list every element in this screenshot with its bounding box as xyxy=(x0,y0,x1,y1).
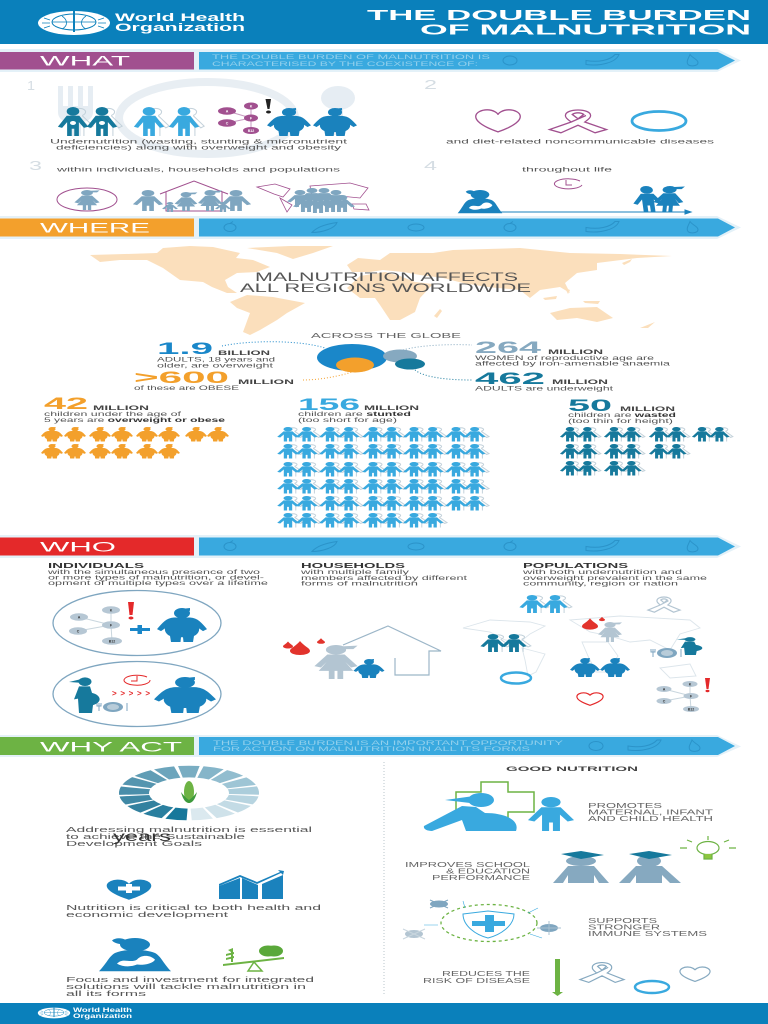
stat: 50 million wasted children: MILLION xyxy=(620,406,676,413)
icon: heart xyxy=(476,110,520,132)
text: reduces the risk of disease xyxy=(423,971,531,985)
elderly couple xyxy=(631,186,685,212)
micronutrient network: F xyxy=(250,116,253,120)
text: promotes health: PROMOTES xyxy=(588,803,663,810)
banner: WHY ACT: WHY ACT xyxy=(40,738,183,754)
text block: households: members affected by different xyxy=(301,575,467,582)
banner: WHY ACT: FOR ACTION ON MALNUTRITION IN ALL ITS FORMS xyxy=(213,746,531,753)
text block: households: forms of malnutrition xyxy=(301,580,418,588)
banner: WHY ACT xyxy=(0,735,741,757)
stat: 462 million underweight: 462 xyxy=(475,369,545,388)
title: THE DOUBLE BURDEN xyxy=(367,8,751,24)
individuals circle: deficiency plus obesity xyxy=(53,590,221,656)
world map xyxy=(90,246,672,335)
stat: 42 million overweight children: children under the age of xyxy=(44,411,181,418)
map heading: ALL REGIONS WORLDWIDE xyxy=(240,283,532,295)
text: promotes health: AND CHILD HEALTH xyxy=(588,816,713,823)
stat: 1.9 billion overweight xyxy=(157,339,275,370)
text: sustainable development goals: years xyxy=(113,828,171,844)
map heading xyxy=(240,272,532,295)
pictogram: blue children xyxy=(277,427,489,528)
footer organisation name: Organization xyxy=(73,1014,133,1020)
micronutrient network: K xyxy=(250,104,253,108)
caption 1 xyxy=(50,138,347,152)
across the globe heading: ACROSS THE GLOBE xyxy=(311,333,462,340)
stat: 462 million underweight xyxy=(475,369,613,392)
text: improves school xyxy=(405,862,531,882)
icon: balance scale with grain and apple xyxy=(223,946,284,971)
micronutrient network: B12 xyxy=(248,129,254,133)
caption 1: deficiencies) along with overweight and obesity xyxy=(56,144,342,152)
stat: 600 million obese: MILLION xyxy=(238,379,295,386)
stat: 42 million overweight children: 5 years are overweight or obese xyxy=(44,417,225,424)
stat: 50 million wasted children: (too thin for height) xyxy=(568,418,673,425)
arrow: down xyxy=(552,959,563,996)
text block: individuals: with the simultaneous presence of two xyxy=(46,569,260,576)
text: promotes health xyxy=(588,803,714,823)
icon: graduates xyxy=(553,851,681,883)
text: improves school: IMPROVES SCHOOL xyxy=(405,862,530,869)
caption 4: throughout life xyxy=(522,166,612,174)
text: improves school: & EDUCATION xyxy=(446,868,530,876)
text block: individuals xyxy=(46,563,268,587)
faint backdrop: fork, plate and spoon xyxy=(58,82,355,154)
bubble cluster xyxy=(317,344,425,372)
number 1: 1 xyxy=(27,78,35,93)
stat: 156 million stunted children: (too short for age) xyxy=(298,417,397,424)
banner: WHAT: THE DOUBLE BURDEN OF MALNUTRITION IS xyxy=(212,54,491,61)
stat: 42 million overweight children: MILLION xyxy=(93,405,150,412)
stat: 264 million women: WOMEN of reproductive age are xyxy=(475,355,654,362)
stat: 156 million stunted children: 156 xyxy=(298,395,360,414)
stat: 462 million underweight: ADULTS are underweight xyxy=(475,386,613,392)
population illustration on world map: B12 xyxy=(688,707,694,711)
stat: 264 million women: 264 xyxy=(475,338,542,357)
icon: pregnant woman, child and green cross xyxy=(424,782,574,831)
text block: populations: with both undernutrition and xyxy=(521,569,682,576)
text block: populations: community, region or nation xyxy=(523,580,678,588)
number 2: 2 xyxy=(424,77,437,92)
dotted connectors xyxy=(222,342,472,380)
panel: what 3 individuals, households, populations xyxy=(29,158,369,213)
text: sustainable development goals xyxy=(66,825,313,848)
pictogram: teal children xyxy=(560,427,733,476)
stat: 1.9 billion overweight: ADULTS, 18 years and xyxy=(157,356,275,364)
text: supports immune systems: SUPPORTS xyxy=(588,918,658,925)
text block: populations: POPULATIONS xyxy=(523,563,629,570)
text: supports immune systems: STRONGER xyxy=(588,924,660,932)
population illustration on world map: A xyxy=(663,687,666,691)
stat: 264 million women: affected by iron-amenable anaemia xyxy=(475,360,670,368)
stat: 50 million wasted children: 50 xyxy=(568,396,612,415)
panel: what 1 undernutrition and overweight xyxy=(27,78,357,154)
banner: WHAT: WHAT xyxy=(40,52,131,68)
individual in a circle xyxy=(57,188,117,211)
population illustration on world map: K xyxy=(689,682,692,686)
stat: 264 million women xyxy=(475,338,670,368)
organisation name xyxy=(115,12,246,34)
household illustration xyxy=(283,626,441,679)
heading: good nutrition: GOOD NUTRITION xyxy=(506,766,639,773)
pictogram: orange children xyxy=(41,427,229,458)
icon: ring xyxy=(632,112,686,130)
banner: WHY ACT: THE DOUBLE BURDEN IS AN IMPORTANT OPPORTUNITY xyxy=(213,740,564,747)
text: sustainable development goals: to achieve the Sustainable xyxy=(66,832,245,841)
text: integrated solutions: solutions will tackle malnutrition in xyxy=(66,982,306,991)
text: health and economic development xyxy=(66,903,321,919)
world outline with crowd xyxy=(257,183,369,213)
population illustration on world map xyxy=(463,595,710,712)
stat: 600 million obese xyxy=(134,368,295,392)
text block: individuals: opment of multiple types over a lifetime xyxy=(48,580,268,587)
banner: WHAT xyxy=(0,49,741,72)
text block: populations: overweight prevalent in the same xyxy=(523,575,707,582)
footer logo xyxy=(38,1008,70,1018)
caption 1: Undernutrition (wasting, stunting & micronutrient xyxy=(50,138,347,146)
icon: mother and baby xyxy=(99,938,171,971)
number 3: 3 xyxy=(29,158,42,173)
panel: what 4 throughout life xyxy=(424,158,691,214)
stat: 600 million obese: of these are OBESE xyxy=(134,385,240,392)
overweight children xyxy=(267,108,357,136)
icon: shield with viruses xyxy=(403,900,561,942)
stat: 462 million underweight: MILLION xyxy=(552,379,609,386)
stat: 1.9 billion overweight: 1.9 xyxy=(157,339,213,358)
stat: 156 million stunted children xyxy=(298,395,420,424)
text block: individuals: or more types of malnutrition, or devel- xyxy=(48,574,264,582)
nursing mother xyxy=(458,190,502,213)
stat: 50 million wasted children: children are wasted xyxy=(568,412,676,419)
text: reduces the risk of disease: REDUCES THE xyxy=(442,971,531,978)
caption 2: and diet-related noncommunicable diseases xyxy=(446,138,715,146)
stunted children xyxy=(134,107,204,136)
map heading: MALNUTRITION AFFECTS xyxy=(255,272,519,284)
text: sustainable development goals: Development Goals xyxy=(66,839,203,848)
caption 3: within individuals, households and populations xyxy=(55,166,341,174)
stat: 1.9 billion overweight: older, are overweight xyxy=(157,362,273,370)
individuals circle: deficiency plus obesity: B12 xyxy=(109,640,115,644)
WHO logo emblem xyxy=(38,11,110,35)
wasted children xyxy=(58,107,122,136)
stat: 42 million overweight children xyxy=(44,394,225,424)
icon: ribbon xyxy=(550,110,606,133)
banner: WHO xyxy=(0,535,741,558)
text block: populations xyxy=(521,563,707,588)
micronutrient network: A xyxy=(226,110,229,114)
title: OF MALNUTRITION xyxy=(420,22,751,38)
individuals circle: change over lifetime: >>>>> xyxy=(112,689,150,698)
population illustration on world map: F xyxy=(690,694,693,698)
SDG ring with corn xyxy=(111,763,267,823)
banner: WHO: WHO xyxy=(40,538,116,554)
stat: 42 million overweight children: 42 xyxy=(44,394,88,413)
icon: light bulb xyxy=(680,836,736,859)
footer organisation name: World Health xyxy=(73,1008,133,1014)
text block: households: with multiple family xyxy=(299,569,410,576)
icon: rising bar chart xyxy=(219,870,284,899)
text block: households: HOUSEHOLDS xyxy=(301,563,406,570)
text: promotes health: MATERNAL, INFANT xyxy=(588,810,714,816)
individuals circle: deficiency plus obesity: K xyxy=(110,608,113,612)
text: integrated solutions: all its forms xyxy=(66,989,147,998)
text block: individuals: INDIVIDUALS xyxy=(48,563,145,570)
organisation name: World Health xyxy=(115,12,246,24)
text: integrated solutions xyxy=(66,975,314,998)
individuals circle: deficiency plus obesity: F xyxy=(110,624,113,628)
header band xyxy=(0,0,768,44)
stat: 600 million obese: >600 xyxy=(134,368,229,387)
icon: corn xyxy=(181,781,197,803)
stat: 156 million stunted children: children are stunted xyxy=(298,411,411,418)
icon: heart with cross xyxy=(107,880,151,900)
text: improves school: PERFORMANCE xyxy=(432,875,531,882)
micronutrient network xyxy=(218,99,271,134)
text: health and economic development: economic development xyxy=(66,910,228,919)
disease icons xyxy=(580,963,710,993)
title xyxy=(367,8,751,38)
banner: WHERE: WHERE xyxy=(40,220,150,236)
text block: households xyxy=(299,563,467,588)
population illustration on world map: C xyxy=(663,699,666,703)
micronutrient network: C xyxy=(226,122,229,126)
individuals circle: deficiency plus obesity: C xyxy=(77,630,80,634)
banner: WHERE xyxy=(0,216,741,239)
panel: what 2 noncommunicable diseases xyxy=(424,77,715,146)
footer band xyxy=(0,1003,768,1024)
individuals circle: change over lifetime xyxy=(53,662,221,726)
stat: 156 million stunted children: MILLION xyxy=(364,405,420,412)
organisation name: Organization xyxy=(115,22,246,34)
text: reduces the risk of disease: RISK OF DISEASE xyxy=(423,978,531,985)
icon: clock xyxy=(554,179,582,189)
stat: 50 million wasted children xyxy=(568,396,676,425)
text: supports immune systems: IMMUNE SYSTEMS xyxy=(588,931,708,938)
stat: 264 million women: MILLION xyxy=(548,349,604,356)
individuals circle: deficiency plus obesity: A xyxy=(78,616,81,620)
text: health and economic development: Nutrition is critical to both health and xyxy=(66,903,321,912)
footer organisation name xyxy=(73,1008,133,1020)
stat: 1.9 billion overweight: BILLION xyxy=(218,350,271,357)
text: sustainable development goals: Addressing malnutrition is essential xyxy=(66,825,313,834)
number 4: 4 xyxy=(424,158,437,173)
text: integrated solutions: Focus and investment for integrated xyxy=(66,975,314,984)
text: supports immune systems xyxy=(588,918,708,938)
household family xyxy=(133,181,251,212)
banner: WHAT: CHARACTERISED BY THE COEXISTENCE OF: xyxy=(212,61,478,68)
life course arrow xyxy=(500,210,691,214)
